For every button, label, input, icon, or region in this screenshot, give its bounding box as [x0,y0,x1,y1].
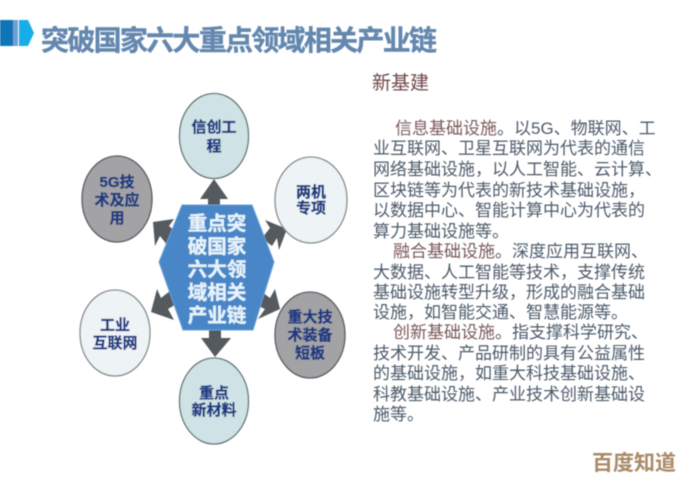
node: 工业互联网: 工业 [100,317,130,334]
text block: 新基建 description: 信息基础设施。以5G、物联网、工 [395,119,656,138]
text block: 新基建 description: 业互联网、卫星互联网为代表的通信 [373,139,645,158]
text block: 新基建 description: 技术开发、产品研制的具有公益属性 [373,344,645,363]
node: 信创工程: 信创工 [191,118,237,136]
hexagon: center: 域相关 [188,282,247,304]
text block: 新基建 description: 大数据、人工智能等技术，支撑传统 [373,263,645,282]
title: 突破国家六大重点领域相关产业链 [41,25,437,56]
icon: title marker [0,20,34,46]
node: 重大技术装备短板 [275,292,345,378]
watermark: 百度知道: 百度知道 [592,452,676,475]
node: 两机专项 [275,157,347,243]
node: 重大技术装备短板: 短板 [295,344,325,362]
heading: 新基建: 新基建 [372,72,429,94]
arrow: to 工业互联网 [151,289,178,320]
text block: 新基建 description: 网络基础设施，以人工智能、云计算、 [373,160,662,179]
text block: 新基建 description: 区块链等为代表的新技术基础设施， [373,181,645,200]
node: 重点新材料: 重点 [199,384,229,402]
hexagon: center: 产业链 [188,305,247,327]
hexagon: center: 六大领 [188,259,246,281]
text block: 新基建 description: 的基础设施，如重大科技基础设施、 [373,364,645,383]
arrow: up to 信创工程 [200,179,228,206]
text block: 新基建 description: 算力基础设施等。 [373,222,509,241]
node: 信创工程 [180,94,248,178]
node: 5G技术及应用: 用 [109,210,125,227]
arrow: to 两机专项 [262,220,287,250]
node: 5G技术及应用: 术及应 [94,191,140,209]
hexagon: center: 破国家 [188,235,247,258]
node: 工业互联网 [80,290,150,376]
node: 工业互联网: 互联网 [92,335,138,352]
node: 重大技术装备短板: 术装备 [287,326,333,344]
node: 两机专项: 两机 [296,184,326,201]
text block: 新基建 description: 以数据中心、智能计算中心为代表的 [373,201,645,220]
node: 重点新材料: 新材料 [191,401,237,419]
arrow: down to 重点新材料 [201,328,231,357]
text block: 新基建 description: 基础设施转型升级，形成的融合基础 [373,283,645,302]
hexagon: center: 重点突 [188,212,246,235]
node: 重点新材料 [180,358,248,444]
text block: 新基建 description: 设施，如智能交通、智慧能源等。 [373,303,628,322]
text block: 新基建 description: 创新基础设施。指支撑科学研究、 [393,323,648,342]
text block: 新基建 description: 科教基础设施、产业技术创新基础设 [373,385,645,404]
node: 5G技术及应用: 5G技 [99,173,135,191]
diagram: six key fields [80,94,347,444]
text block: 新基建 description: 施等。 [373,405,424,424]
arrow: to 重大技术装备短板 [254,289,280,319]
node: 5G技术及应用 [82,156,152,242]
text block: 新基建 description [373,119,662,424]
text block: 新基建 description: 融合基础设施。深度应用互联网、 [393,242,648,261]
hexagon: center [159,205,274,330]
node: 信创工程: 程 [206,138,222,155]
node: 重大技术装备短板: 重大技 [287,308,333,326]
node: 两机专项: 专项 [296,199,326,217]
arrow: to 5G技术及应用 [153,219,178,246]
